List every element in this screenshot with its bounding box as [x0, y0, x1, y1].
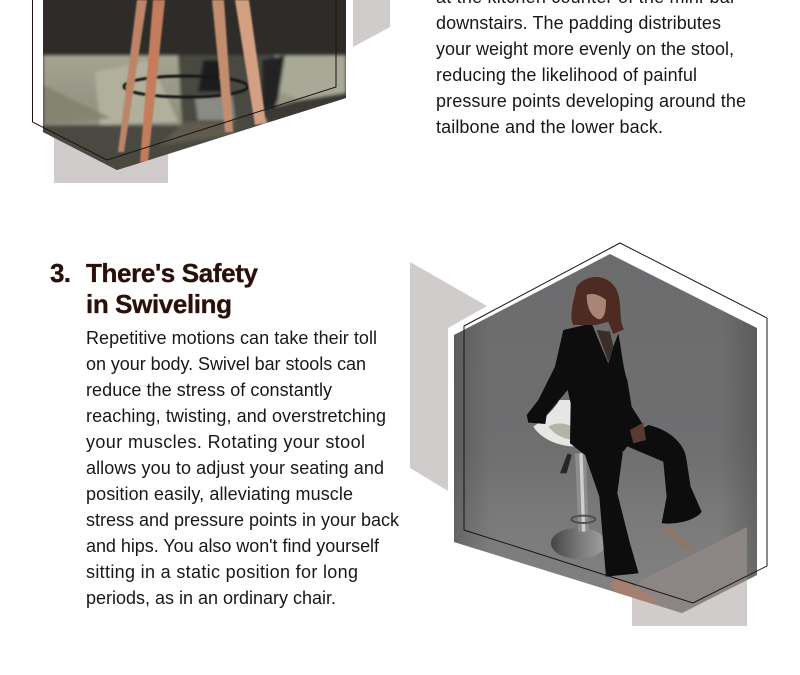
jacket — [527, 323, 643, 452]
panel: section 2 image group — [32, 0, 390, 183]
photo: woman seated on swivel bar stool — [454, 254, 757, 626]
heading: section 3 — [50, 258, 259, 319]
text block: section 2 body copy: pressure points developing around the — [436, 91, 746, 111]
grey accent block lower right — [632, 560, 747, 626]
stool seat — [533, 400, 577, 447]
raised foot leg — [620, 425, 702, 524]
text block: section 2 body copy: tailbone and the lower back. — [436, 117, 663, 137]
text block: section 3 body copy — [86, 328, 400, 608]
text block: section 3 body copy: reaching, twisting, and overstretching — [86, 406, 386, 426]
text block: section 2 body copy — [436, 0, 746, 137]
face — [587, 294, 606, 319]
stool ring and legs — [118, 0, 266, 162]
photo: wooden bar stool legs — [43, 0, 346, 175]
thin outline hexagon — [32, 0, 336, 160]
text block: section 3 body copy: reduce the stress of constantly — [86, 380, 332, 400]
grey accent shape upper right — [353, 0, 390, 47]
grey accent block lower left — [54, 130, 168, 183]
text block: section 3 body copy: position easily, alleviating muscle — [86, 484, 353, 504]
text block: section 3 body copy: on your body. Swivel bar stools can — [86, 354, 366, 374]
text block: section 3 body copy: and hips. You also won't find yourself — [86, 536, 380, 556]
heading: section 3: There's Safety — [86, 258, 259, 288]
text block: section 2 body copy: reducing the likelihood of painful — [436, 65, 697, 85]
text block: section 3 body copy: sitting in a static position for long — [86, 562, 358, 582]
text block: section 2 body copy: downstairs. The padding distributes — [436, 13, 721, 33]
chest skin — [597, 330, 613, 362]
heading: section 3: 3. — [50, 258, 71, 288]
text block: section 2 body copy: your weight more evenly on the stool, — [436, 39, 734, 59]
shoes — [662, 523, 695, 549]
hand on knee — [630, 423, 646, 443]
standing leg — [570, 441, 639, 577]
text block: section 3 body copy: periods, as in an ordinary chair. — [86, 588, 336, 608]
text block: section 3 body copy: stress and pressure points in your back — [86, 510, 400, 530]
stool base and pole — [551, 528, 606, 559]
grey accent shape left — [410, 262, 487, 491]
text block: section 3 body copy: allows you to adjust your seating and — [86, 458, 384, 478]
heading: section 3: in Swiveling — [86, 289, 232, 319]
thin outline hexagon — [464, 243, 767, 603]
text block: section 3 body copy: Repetitive motions can take their toll — [86, 328, 377, 348]
panel: section 3 image group — [410, 243, 767, 626]
hair — [571, 277, 624, 334]
text block: section 3 body copy: your muscles. Rotating your stool — [86, 432, 365, 452]
